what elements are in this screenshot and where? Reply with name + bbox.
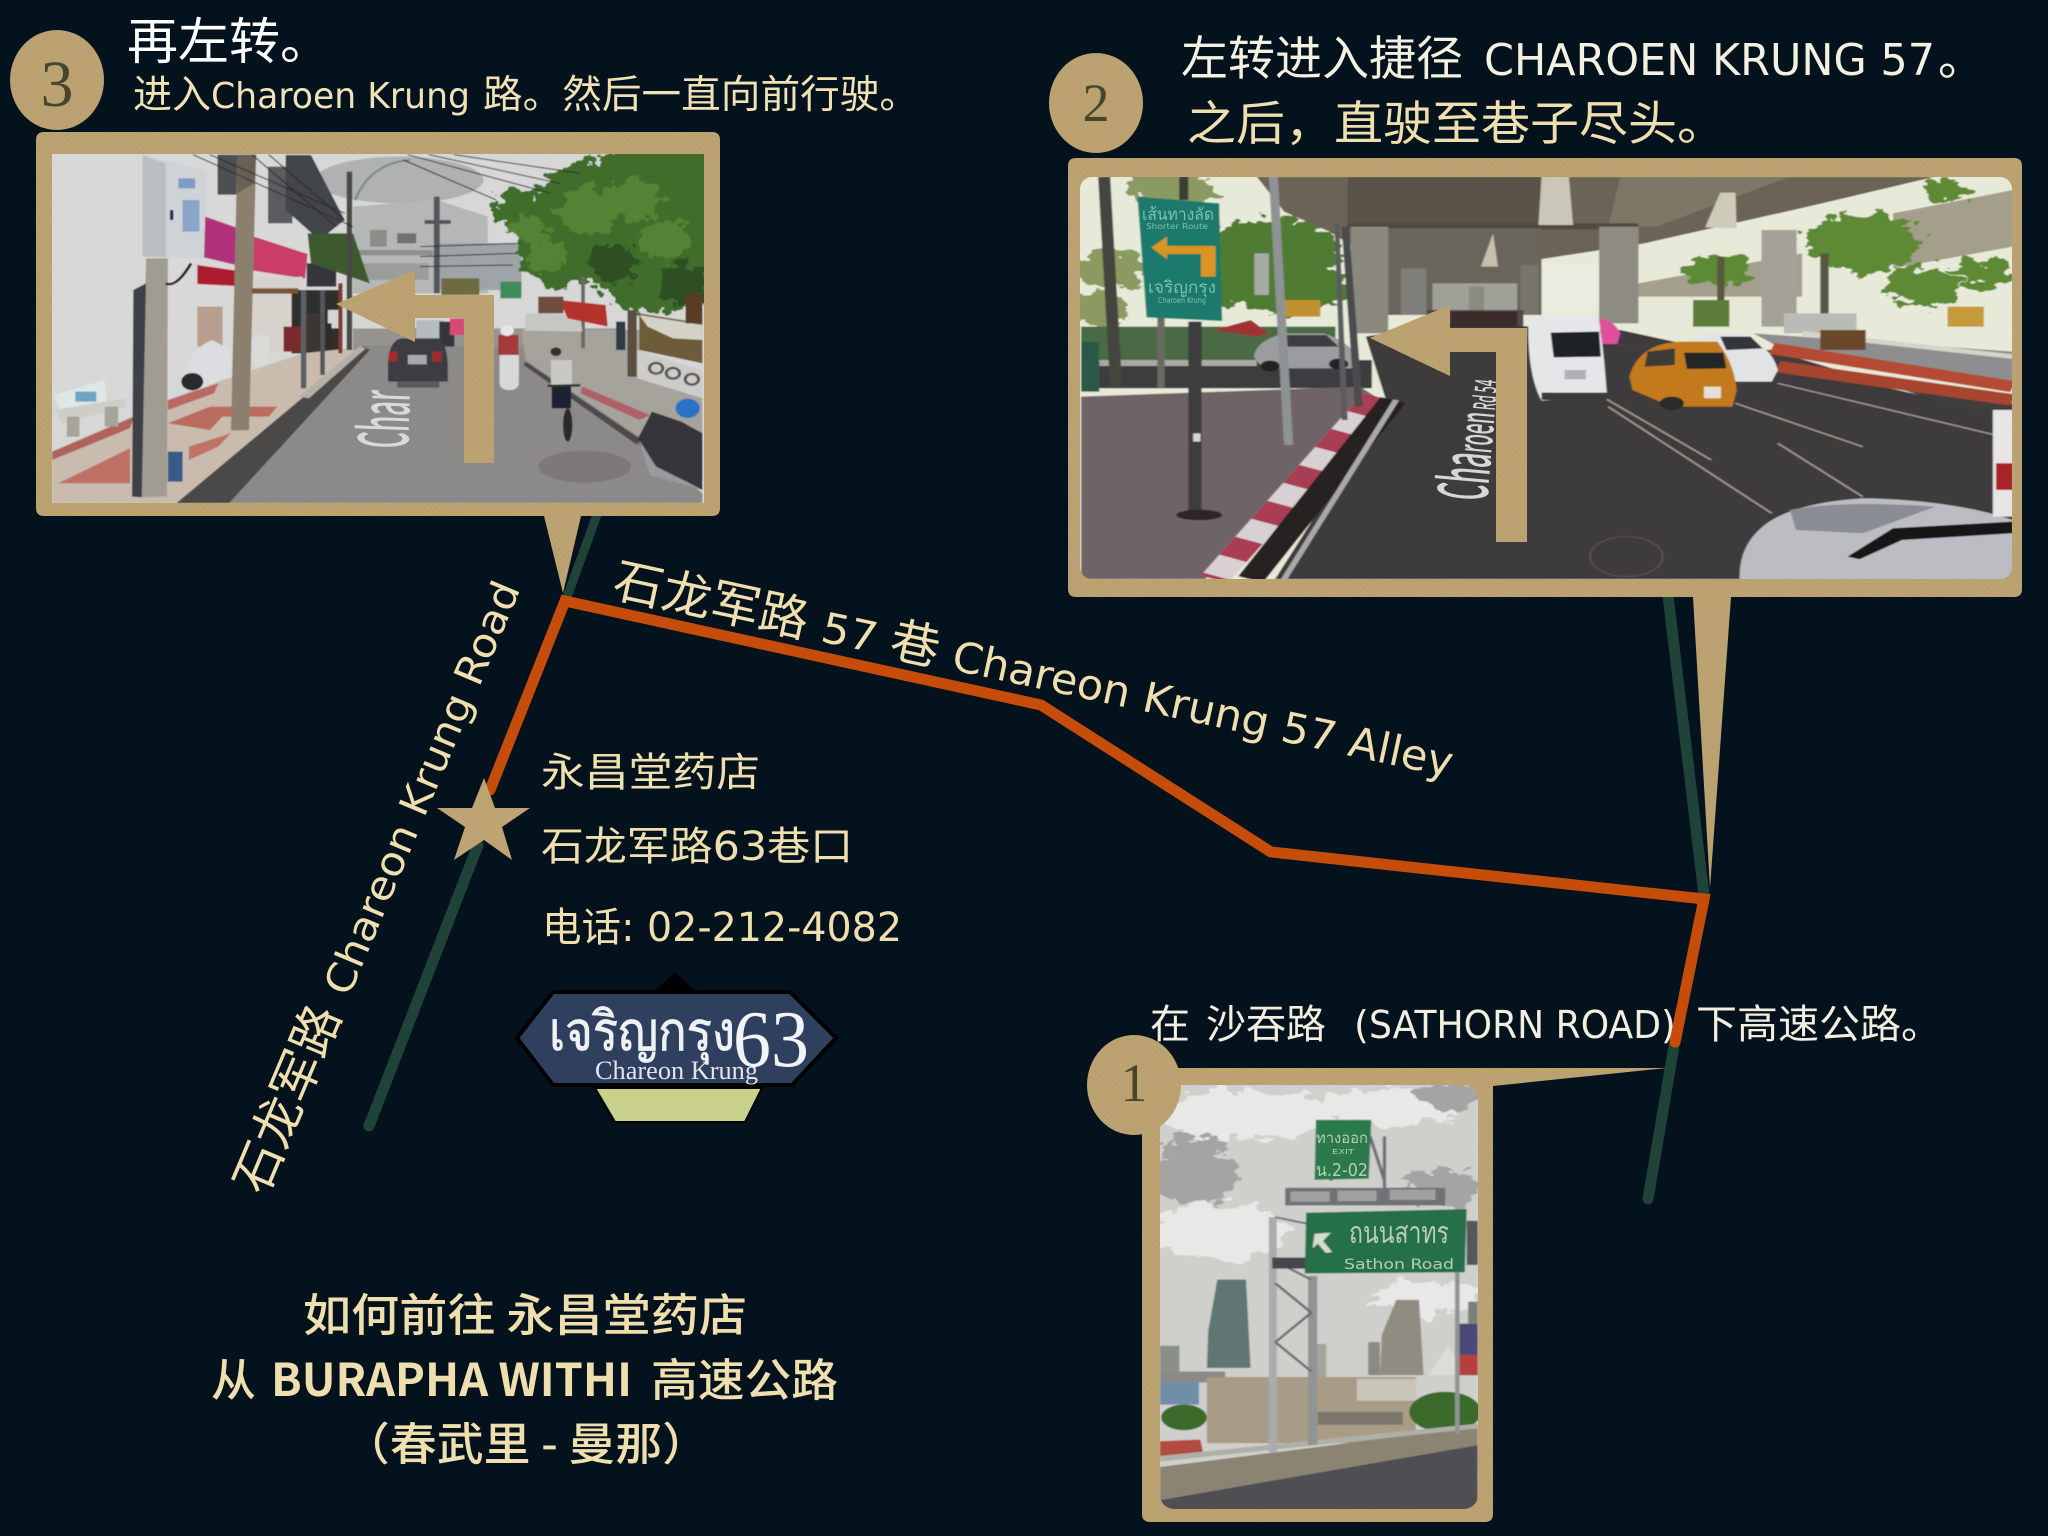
shop address text xyxy=(541,750,902,951)
step 2 instruction text: CHAROEN KRUNG 57 xyxy=(1484,35,1935,86)
road label: Charoen Krung 57 Alley: 57 xyxy=(817,603,882,663)
title: how to get there: BURAPHA WITHI xyxy=(271,1344,632,1409)
badge: step 3 xyxy=(10,30,104,130)
road sign text in panel 2 xyxy=(1142,205,1216,305)
badge: step 2 xyxy=(1049,53,1143,153)
shop sign logo: Chareon Krung xyxy=(595,1056,758,1085)
step 1 instruction text: 下高速公路。 xyxy=(1696,1002,1942,1048)
highway sign text in panel 1: EXIT xyxy=(1332,1148,1355,1156)
shop sign logo xyxy=(517,972,836,1122)
step 3 instruction text: 进入 xyxy=(133,73,211,118)
title: how to get there: 如何前往 永昌堂药店 xyxy=(303,1279,747,1344)
shop address text: 电话: 02-212-4082 xyxy=(542,905,902,951)
road sign text in panel 2: Shorter Route xyxy=(1146,222,1208,231)
panel 2 street photo illustration xyxy=(1069,167,2025,590)
highway sign text in panel 1: ถนนสาทร xyxy=(1349,1216,1449,1251)
step 2 instruction text xyxy=(1181,32,1985,152)
road label: Charoen Krung Road: Chareon Krung Road xyxy=(316,575,530,1002)
highway sign text in panel 1: ทางออก xyxy=(1316,1129,1368,1147)
step 1 instruction text: 在 xyxy=(1150,1002,1190,1048)
step 1 instruction text: ( xyxy=(1354,1003,1369,1047)
panel 1 highway photo illustration xyxy=(1148,1081,1481,1511)
panel 2 turn arrow xyxy=(1370,305,1527,542)
badge: step 2: 2 xyxy=(1082,73,1110,133)
badge: step 1 xyxy=(1087,1035,1181,1135)
title: how to get there: （春武里 - 曼那） xyxy=(343,1408,709,1473)
road label: Charoen Krung 57 Alley: Chareon Krung 57 Alley xyxy=(948,631,1458,787)
step 1 instruction text: ) xyxy=(1661,1003,1676,1047)
step 3 instruction text: Charoen Krung xyxy=(211,76,470,117)
step 3 instruction text: 再左转。 xyxy=(127,13,331,71)
panel 3: left turn onto Charoen Krung xyxy=(36,132,736,593)
shop address text: 永昌堂药店 xyxy=(541,750,760,796)
badge: step 1: 1 xyxy=(1120,1053,1148,1113)
step 1 instruction text: 沙吞路 xyxy=(1206,1002,1326,1048)
road marking text in panel 2: Charoen Rd 54 xyxy=(1408,374,1518,504)
road sign text in panel 2: Charoen Krung xyxy=(1158,296,1206,305)
panel 3 frame with pointer xyxy=(36,132,720,593)
road label: Charoen Krung 57 Alley: 巷 xyxy=(885,612,945,678)
panel 1: exit expressway at Sathorn Road xyxy=(1142,1068,1667,1522)
step 1 instruction text: SATHORN ROAD xyxy=(1369,1003,1661,1047)
map roads: dark green streets xyxy=(369,512,1704,1199)
highway sign text in panel 1: น.2-02 xyxy=(1316,1160,1368,1181)
map route: orange path xyxy=(490,601,1704,1042)
panel 2 frame with pointer xyxy=(1068,158,2022,888)
title: how to get there xyxy=(211,1279,838,1473)
road sign text in panel 2: เจริญกรุง xyxy=(1148,278,1216,298)
title: how to get there: 从 xyxy=(211,1344,256,1409)
panel 3: left turn onto Charoen Krung: Char xyxy=(329,388,430,450)
road sign text in panel 2: เส้นทางลัด xyxy=(1142,205,1214,225)
road label: Charoen Krung 57 Alley: 石龙军路 xyxy=(608,552,814,650)
panel 3 turn arrow xyxy=(336,270,494,463)
step 2 instruction text: 。 xyxy=(1938,32,1985,87)
shop sign logo: เจริญกรุง xyxy=(549,1002,735,1065)
shop address text: 石龙军路63巷口 xyxy=(541,824,853,870)
panel 2: shortcut into Charoen Krung 57 xyxy=(1068,158,2025,888)
step 3 instruction text: 路。然后一直向前行驶。 xyxy=(483,73,919,118)
title: how to get there: 高速公路 xyxy=(651,1344,838,1409)
step 2 instruction text: 左转进入捷径 xyxy=(1181,32,1463,87)
route end overlapping label xyxy=(1675,899,1704,1042)
highway sign text in panel 1 xyxy=(1316,1129,1454,1273)
badge: step 3: 3 xyxy=(40,48,74,121)
panel 1 frame with pointer xyxy=(1142,1068,1667,1522)
panel 3 street photo illustration xyxy=(52,154,704,503)
step 3 instruction text xyxy=(127,13,919,118)
star: destination marker xyxy=(437,778,530,860)
shop sign logo: 63 xyxy=(733,996,809,1084)
road label: Charoen Krung Road: 石龙军路 xyxy=(223,997,353,1202)
step 2 instruction text: 之后，直驶至巷子尽头。 xyxy=(1187,97,1726,152)
highway sign text in panel 1: Sathon Road xyxy=(1344,1257,1454,1273)
